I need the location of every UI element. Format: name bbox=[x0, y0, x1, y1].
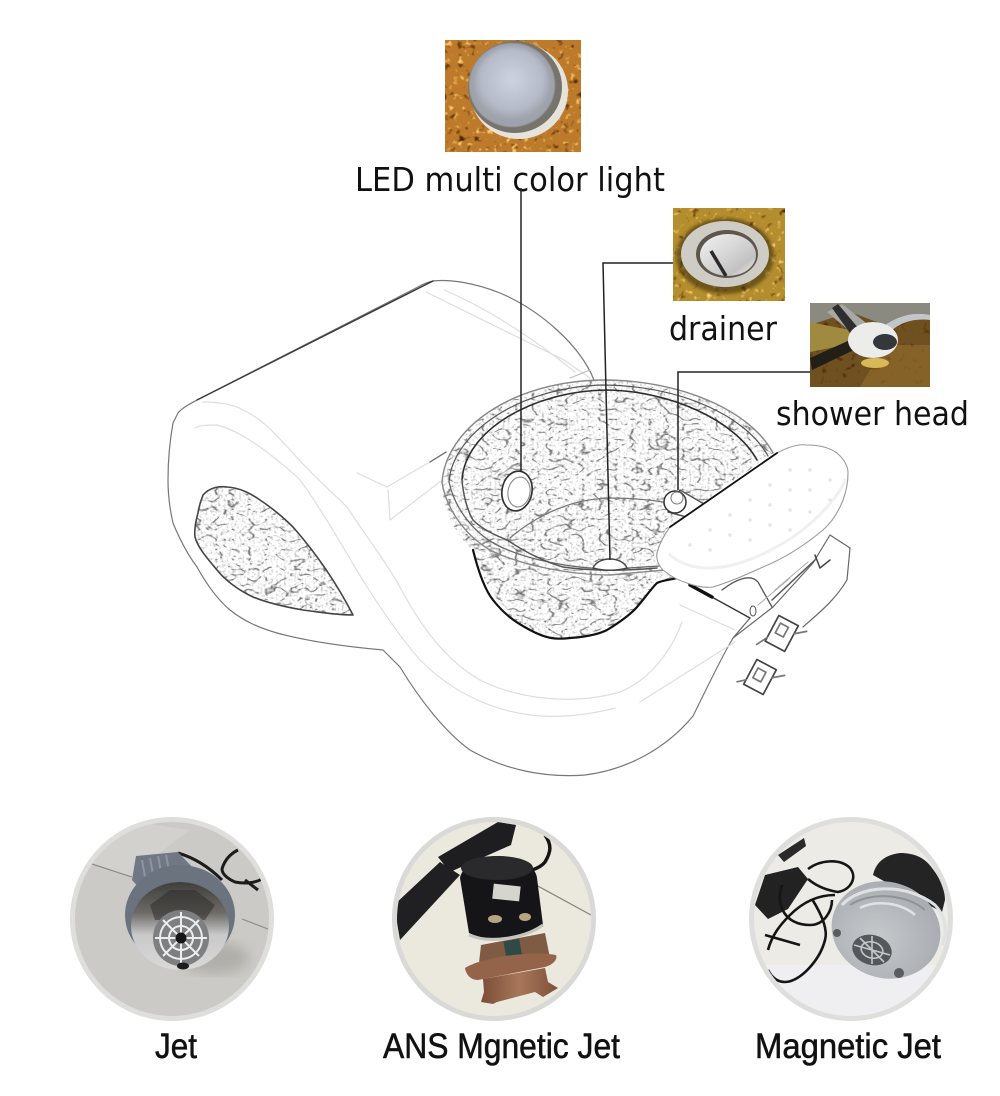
photo: shower head bbox=[810, 303, 930, 387]
label: LED multi color light: LED multi color light bbox=[355, 160, 665, 199]
right end box bbox=[690, 535, 850, 638]
fastener clamp upper bbox=[757, 613, 807, 662]
label: drainer: drainer bbox=[669, 309, 777, 348]
label: Jet: Jet bbox=[155, 1027, 197, 1066]
body outline bbox=[168, 280, 733, 776]
leader line: shower head bbox=[678, 372, 810, 490]
darker top edge bbox=[197, 281, 433, 400]
side panel bbox=[194, 486, 354, 616]
label: Magnetic Jet: Magnetic Jet bbox=[755, 1027, 941, 1066]
spa basin line drawing bbox=[168, 280, 850, 776]
LED ring in bowl bbox=[499, 469, 535, 513]
photo circle: ANS Mgnetic Jet bbox=[392, 817, 596, 1022]
shower head in bowl bbox=[664, 490, 704, 518]
photo circle: Magnetic Jet bbox=[749, 817, 954, 1022]
foot rest pillow bbox=[657, 445, 848, 587]
bowl bbox=[430, 370, 780, 645]
fastener clamp lower bbox=[737, 656, 785, 700]
leader line: LED light bbox=[520, 188, 522, 472]
photo: drainer bbox=[673, 208, 785, 301]
drain in bowl bbox=[593, 559, 627, 570]
photo: LED multi color light bbox=[445, 40, 581, 152]
leader line: drainer bbox=[603, 263, 673, 560]
label: shower head: shower head bbox=[776, 394, 969, 433]
light contour lines bbox=[195, 290, 735, 716]
label: ANS Mgnetic Jet: ANS Mgnetic Jet bbox=[383, 1027, 620, 1066]
photo circle: Jet bbox=[70, 817, 274, 1022]
